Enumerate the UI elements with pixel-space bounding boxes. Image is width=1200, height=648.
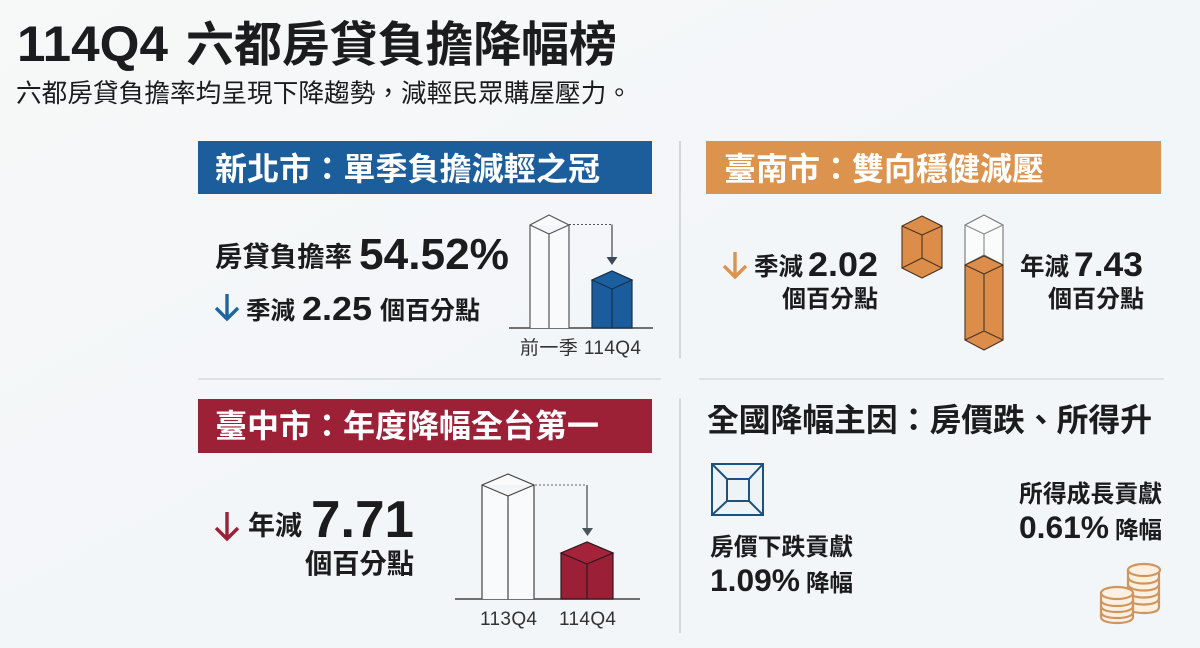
quarterly decrease <box>754 246 878 313</box>
house price contribution: 1.09% <box>710 562 800 598</box>
bar chart: 113Q4 vs 114Q4: 114Q4 <box>559 609 616 630</box>
yearly decrease: 年減 <box>248 511 302 541</box>
yearly decrease: 個百分點 <box>1048 286 1144 313</box>
icon: coin stacks <box>1101 564 1160 623</box>
quarterly decrease: 2.25 <box>302 290 372 327</box>
bar chart: prior quarter vs 114Q4 <box>509 215 653 359</box>
income contribution: 0.61% <box>1019 509 1109 545</box>
yearly decrease: 7.71 <box>311 491 414 549</box>
mortgage burden rate <box>215 230 509 279</box>
yearly decrease <box>1020 246 1144 313</box>
heading: New Taipei: 新北市：單季負擔減輕之冠 <box>215 151 600 187</box>
icon: house price frame <box>712 464 763 515</box>
yearly decrease: 年減 <box>1020 253 1070 281</box>
quarterly decrease: 季減 <box>246 297 296 325</box>
panel: New Taipei <box>198 141 653 359</box>
icon: down arrow blue <box>216 294 238 319</box>
heading: Taichung <box>198 399 652 453</box>
heading: Tainan: 臺南市：雙向穩健減壓 <box>724 151 1044 187</box>
icon: down arrow red <box>216 512 238 539</box>
title: 六都房貸負擔降幅榜 <box>186 19 617 72</box>
bar chart: 113Q4 vs 114Q4 <box>455 474 640 630</box>
house price contribution: 降幅 <box>806 570 853 596</box>
heading: Tainan <box>706 141 1161 194</box>
bar chart: 113Q4 vs 114Q4: 113Q4 <box>480 609 537 630</box>
income contribution <box>1019 481 1162 545</box>
quarterly decrease: 個百分點 <box>782 286 878 313</box>
panel: Tainan <box>706 141 1161 350</box>
yearly decrease: 7.43 <box>1074 246 1143 284</box>
house price contribution: 房價下跌貢獻 <box>710 534 853 561</box>
title: 114Q4 <box>17 16 168 72</box>
subtitle: 六都房貸負擔率均呈現下降趨勢，減輕民眾購屋壓力。 <box>16 79 632 108</box>
quarterly decrease: 個百分點 <box>380 297 480 325</box>
bar chart: prior quarter vs 114Q4: 前一季 114Q4 <box>520 337 641 359</box>
income contribution: 所得成長貢獻 <box>1019 481 1162 508</box>
house price contribution <box>710 534 853 598</box>
heading: Taichung: 臺中市：年度降幅全台第一 <box>215 408 599 444</box>
income contribution: 降幅 <box>1115 517 1162 543</box>
quarterly decrease <box>246 290 480 327</box>
quarterly decrease: 季減 <box>754 253 804 281</box>
mortgage burden rate: 54.52% <box>359 230 509 279</box>
quarterly decrease: 2.02 <box>808 246 878 284</box>
icon: small orange prism <box>902 216 942 278</box>
mortgage burden rate: 房貸負擔率 <box>215 241 352 272</box>
yearly decrease: 個百分點 <box>305 548 414 579</box>
yearly decrease <box>248 491 414 579</box>
icon: down arrow orange <box>724 252 746 277</box>
panel: national causes <box>707 402 1162 623</box>
heading: New Taipei <box>198 141 652 194</box>
icon: tall prism with fill <box>965 215 1003 350</box>
title <box>17 16 617 72</box>
heading: national causes: 全國降幅主因：房價跌、所得升 <box>707 402 1152 438</box>
panel: Taichung <box>198 399 652 630</box>
